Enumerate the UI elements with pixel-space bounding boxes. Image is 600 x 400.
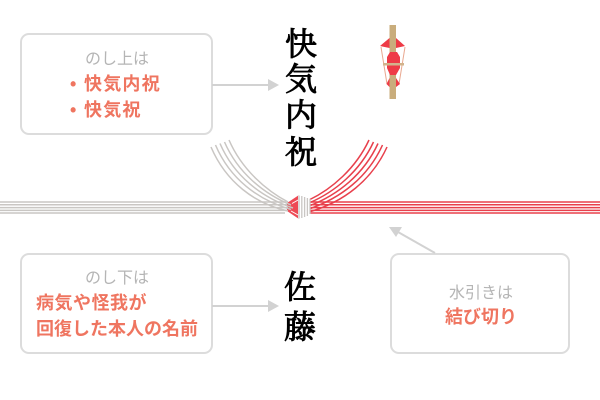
panel: above the noshi: 快気祝: [84, 99, 142, 120]
mizuhiki: red cords: [309, 140, 600, 213]
panel: mizuhiki: 結び切り: [445, 307, 517, 327]
calligraphy: upper inscription: [285, 26, 317, 170]
panel: above the noshi: •: [70, 100, 76, 120]
panel: below the noshi: 病気や怪我が: [36, 292, 147, 313]
panel: above the noshi: •: [70, 74, 76, 94]
panel: below the noshi: 回復した本人の名前: [36, 319, 198, 339]
icon: noshi ornament: [380, 25, 405, 99]
calligraphy: upper inscription: 気: [285, 61, 317, 97]
calligraphy: upper inscription: 内: [285, 97, 317, 133]
arrow: top box to upper inscription: [212, 79, 279, 91]
calligraphy: family name: [284, 269, 316, 345]
panel: above the noshi: [21, 34, 212, 134]
panel: above the noshi: のし上は: [85, 50, 149, 68]
calligraphy: upper inscription: 快: [285, 26, 317, 62]
arrow: bottom box to family name: [212, 300, 279, 312]
mizuhiki: red knot wings: [287, 195, 299, 219]
calligraphy: upper inscription: 祝: [285, 134, 317, 170]
arrow: right box to cords: [389, 227, 435, 253]
panel: mizuhiki: 水引きは: [449, 284, 513, 302]
panel: above the noshi: 快気内祝: [84, 73, 161, 94]
mizuhiki: white cords: [0, 140, 293, 213]
calligraphy: family name: 藤: [284, 309, 316, 345]
mizuhiki: knot band: [298, 195, 310, 219]
panel: below the noshi: [21, 254, 212, 353]
panel: below the noshi: のし下は: [85, 270, 149, 287]
calligraphy: family name: 佐: [284, 269, 316, 305]
panel: mizuhiki: [391, 254, 569, 353]
